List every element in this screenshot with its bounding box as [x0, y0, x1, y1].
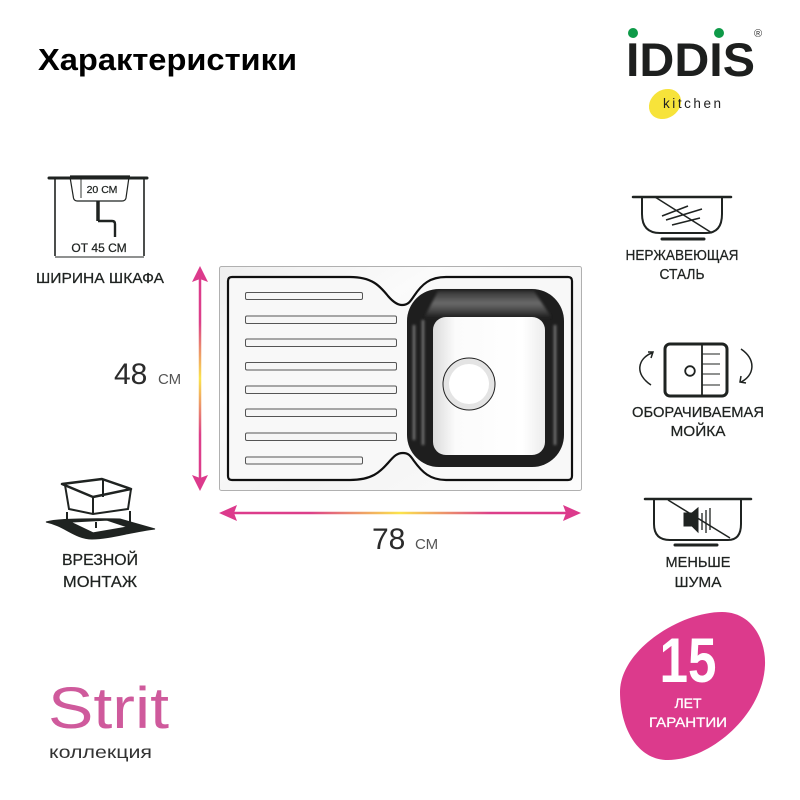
label: reversible: ОБОРАЧИВАЕМАЯ — [632, 404, 764, 421]
warranty badge — [620, 612, 765, 760]
label: installation: МОНТАЖ — [63, 574, 138, 591]
height dimension: 48 cm — [114, 266, 208, 491]
collection name: Strit — [48, 676, 169, 741]
icon: cabinet width diagram — [49, 176, 147, 257]
warranty badge: ГАРАНТИИ — [649, 714, 727, 730]
bowl — [407, 289, 564, 467]
logo: IDDIS kitchen: kitchen — [663, 96, 721, 111]
label: sink: МОЙКА — [670, 422, 726, 440]
warranty badge: ЛЕТ — [674, 695, 702, 711]
icon: stainless steel — [633, 197, 731, 239]
icon: less noise — [645, 499, 751, 545]
label: cabinet width: ШИРИНА ШКАФА — [36, 270, 164, 287]
label: steel: СТАЛЬ — [660, 267, 704, 283]
width dimension: 78 cm: 78 — [372, 523, 405, 556]
icon: reversible sink — [640, 344, 752, 396]
logo: IDDIS kitchen: IDDIS — [626, 33, 755, 86]
drainer ribs — [246, 292, 396, 464]
label: noise: ШУМА — [674, 574, 722, 591]
sink plate — [220, 266, 582, 490]
width dimension: 78 cm: СМ — [415, 536, 438, 553]
label: stainless: НЕРЖАВЕЮЩАЯ — [626, 248, 738, 264]
logo: IDDIS kitchen — [626, 28, 762, 125]
collection caption: коллекция — [49, 742, 152, 762]
label: less: МЕНЬШЕ — [666, 554, 730, 571]
title: Характеристики — [38, 42, 297, 77]
label: от 45 см: ОТ 45 СМ — [71, 241, 127, 255]
height dimension: 48 cm: СМ — [158, 371, 181, 388]
icon: undermount installation — [46, 479, 155, 539]
drainer groove — [228, 277, 572, 480]
label: undermount: ВРЕЗНОЙ — [62, 551, 138, 569]
sink — [220, 266, 582, 490]
warranty badge: 15 — [660, 626, 716, 696]
height dimension: 48 cm: 48 — [114, 358, 147, 391]
label: 20 см: 20 СМ — [87, 184, 117, 196]
width dimension: 78 cm — [219, 505, 581, 556]
drain — [443, 358, 495, 410]
logo: IDDIS kitchen: ® — [754, 28, 762, 40]
